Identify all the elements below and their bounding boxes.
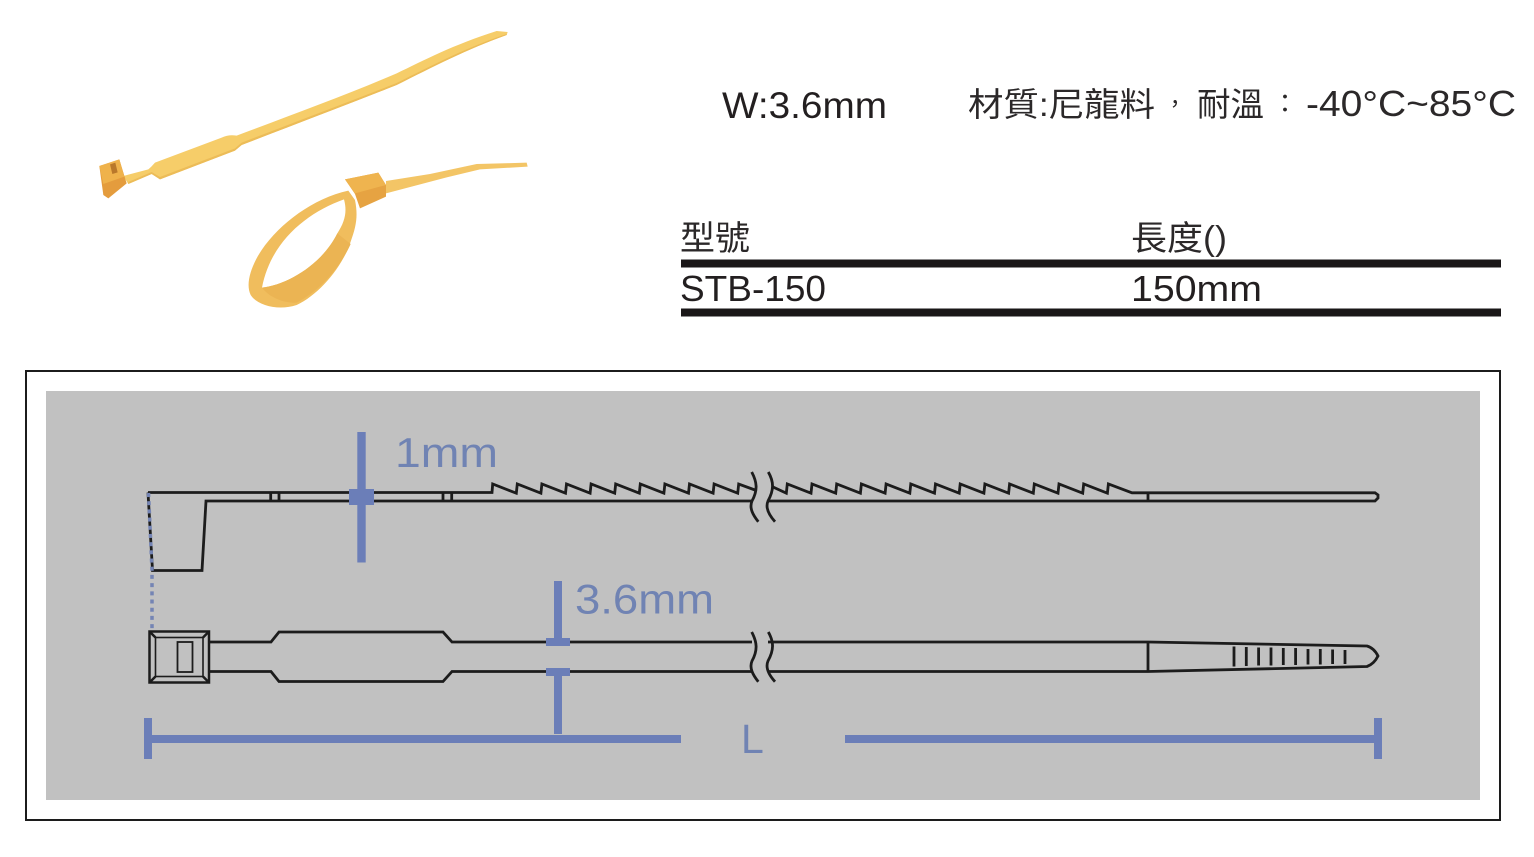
top view of cable tie xyxy=(150,632,1378,682)
diagram gray background xyxy=(46,391,1480,800)
specification table xyxy=(680,220,1501,316)
cable tie head xyxy=(150,632,209,682)
width label: W:3.6mm xyxy=(722,85,887,126)
side view break mark xyxy=(751,472,775,522)
dimension: 1mm thickness xyxy=(349,429,498,562)
dimension: overall length L: L xyxy=(741,716,764,762)
product photo: two yellow cable ties xyxy=(99,31,528,308)
table header: length: 長度() xyxy=(1131,220,1227,258)
top view break mark xyxy=(751,632,775,682)
material and temperature label: ： xyxy=(1272,89,1298,119)
dimension: 1mm thickness: 1mm xyxy=(395,429,498,476)
serration ticks near the tip xyxy=(1234,646,1345,666)
diagram panel frame xyxy=(26,371,1500,820)
dimension: 3.6mm width xyxy=(546,576,714,734)
straight cable tie xyxy=(99,31,508,198)
table cell: model value: STB-150 xyxy=(680,268,826,309)
side view of cable tie xyxy=(148,472,1378,570)
material and temperature label xyxy=(968,83,1516,124)
dimension: overall length L xyxy=(144,716,1382,762)
table header: model: 型號 xyxy=(680,220,750,258)
material and temperature label: 耐溫 xyxy=(1197,86,1264,123)
table cell: length value: 150mm xyxy=(1131,268,1262,309)
material and temperature label: -40°C~85°C xyxy=(1306,83,1516,124)
dimension: 3.6mm width: 3.6mm xyxy=(575,576,714,622)
looped cable tie xyxy=(249,163,528,308)
material and temperature label: 材質:尼龍料 xyxy=(968,86,1155,123)
dotted alignment line xyxy=(148,493,152,632)
material and temperature label: ， xyxy=(1164,92,1186,117)
